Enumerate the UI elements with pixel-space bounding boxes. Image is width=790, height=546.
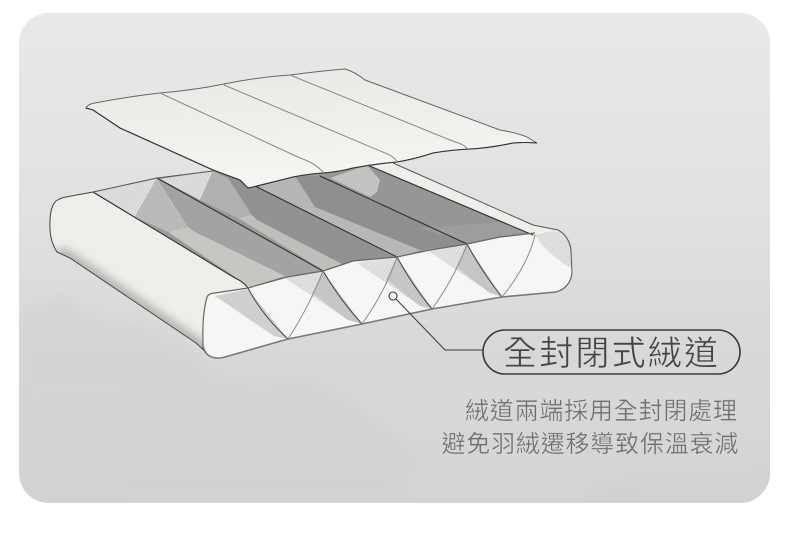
callout: heading pill: 全封閉式絨道	[503, 335, 720, 373]
front triangle fold lines	[248, 235, 535, 339]
illustration: lower pillow with open channels	[50, 163, 572, 358]
bolster shadow	[57, 252, 208, 352]
channel 4 cavity	[325, 164, 533, 244]
sheet surface	[86, 69, 537, 188]
ridge lines of channels	[93, 164, 533, 288]
front face of pillow	[203, 231, 572, 358]
pillow outline	[50, 163, 572, 358]
background: misty mountains	[19, 294, 790, 520]
channel 3 cavity	[257, 176, 467, 258]
sheet seams	[160, 75, 467, 172]
pillow body	[50, 163, 572, 358]
description text: 避免羽絨遷移導致保溫衰減	[442, 431, 739, 458]
sheet dark bottom edge	[86, 108, 537, 188]
channel 2 cavity	[160, 171, 397, 270]
channel 1 cavity	[93, 178, 323, 287]
channel cavity base	[93, 164, 533, 287]
illustration: upper sheet lifted from pillow	[86, 69, 537, 188]
description text	[442, 398, 739, 458]
callout: leader line with marker	[389, 292, 483, 350]
description text: 絨道兩端採用全封閉處理	[465, 398, 738, 425]
